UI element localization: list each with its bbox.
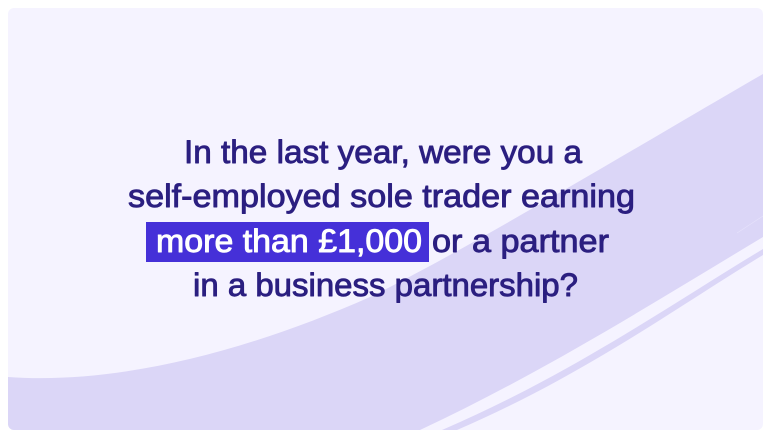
highlight box: [146, 222, 429, 262]
line 4: in a business partnership?: [193, 267, 578, 303]
decorative swoosh shapes: [8, 74, 763, 430]
swoosh: faint highlight line: [737, 216, 763, 233]
swoosh: thin stripe: [442, 249, 763, 430]
question text: [128, 134, 635, 303]
line 3 remainder: or a partner: [432, 223, 609, 259]
highlighted text: more than £1,000: [156, 223, 422, 259]
swoosh: main curved band: [8, 74, 763, 430]
line 1: In the last year, were you a: [184, 134, 583, 170]
line 2: self-employed sole trader earning: [128, 178, 635, 214]
